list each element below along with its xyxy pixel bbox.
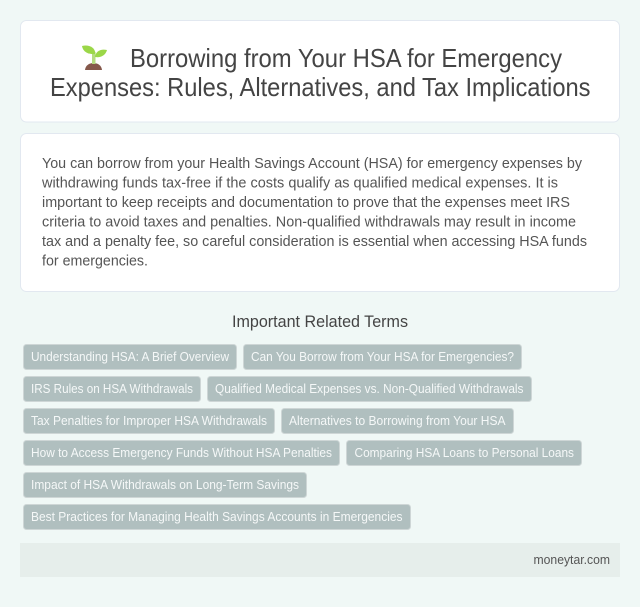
title [50,43,590,102]
chip: understanding HSA [24,344,236,370]
chip: best practices: Best Practices for Managing Health Savings Accounts in Emergencies [31,509,403,524]
chip: IRS rules: IRS Rules on HSA Withdrawals [31,381,193,396]
chip: IRS rules [24,376,200,402]
panel: summary card [20,134,620,292]
chip: can you borrow [244,344,522,370]
chip: tax penalties: Tax Penalties for Improper HSA Withdrawals [31,413,267,428]
chip: impact on savings: Impact of HSA Withdrawals on Long-Term Savings [31,477,299,492]
chip: understanding HSA: Understanding HSA: A Brief Overview [31,349,230,364]
chip: can you borrow: Can You Borrow from Your HSA for Emergencies? [251,349,514,364]
chip: qualified medical expenses [208,376,532,402]
chip: comparing loans: Comparing HSA Loans to Personal Loans [354,445,574,460]
title: Borrowing from Your HSA for Emergency [130,43,562,73]
summary text: tax and a penalty fee, so careful consideration is essential when accessing HSA funds [42,233,587,250]
title: Expenses: Rules, Alternatives, and Tax Implications [50,72,590,102]
footer text: moneytar.com [534,552,610,567]
summary text: important to keep receipts and documentation to prove that the expenses meet IRS [42,194,570,211]
summary text: criteria to avoid taxes and penalties. Non-qualified withdrawals may result in income [42,214,576,230]
summary text: withdrawing funds tax-free if the costs qualify as qualified medical expenses. It is [41,174,558,192]
heading: related terms: Important Related Terms [232,312,408,331]
summary text: for emergencies. [42,252,148,270]
chip: best practices [24,504,410,530]
footer bar [20,543,620,577]
chip: comparing loans [346,440,582,466]
summary text: You can borrow from your Health Savings Account (HSA) for emergency expenses by [42,155,582,172]
term chips [24,344,582,530]
icon: seedling [82,46,107,70]
chip: alternatives: Alternatives to Borrowing from Your HSA [289,413,506,428]
panel: title card [20,20,620,122]
chip: qualified medical expenses: Qualified Medical Expenses vs. Non-Qualified Withdrawals [215,381,524,396]
summary text [41,155,587,270]
chip: alternatives [282,408,514,434]
chip: access emergency funds: How to Access Emergency Funds Without HSA Penalties [31,445,332,460]
chip: tax penalties [24,408,274,434]
chip: impact on savings [24,472,306,498]
chip: access emergency funds [24,440,340,466]
